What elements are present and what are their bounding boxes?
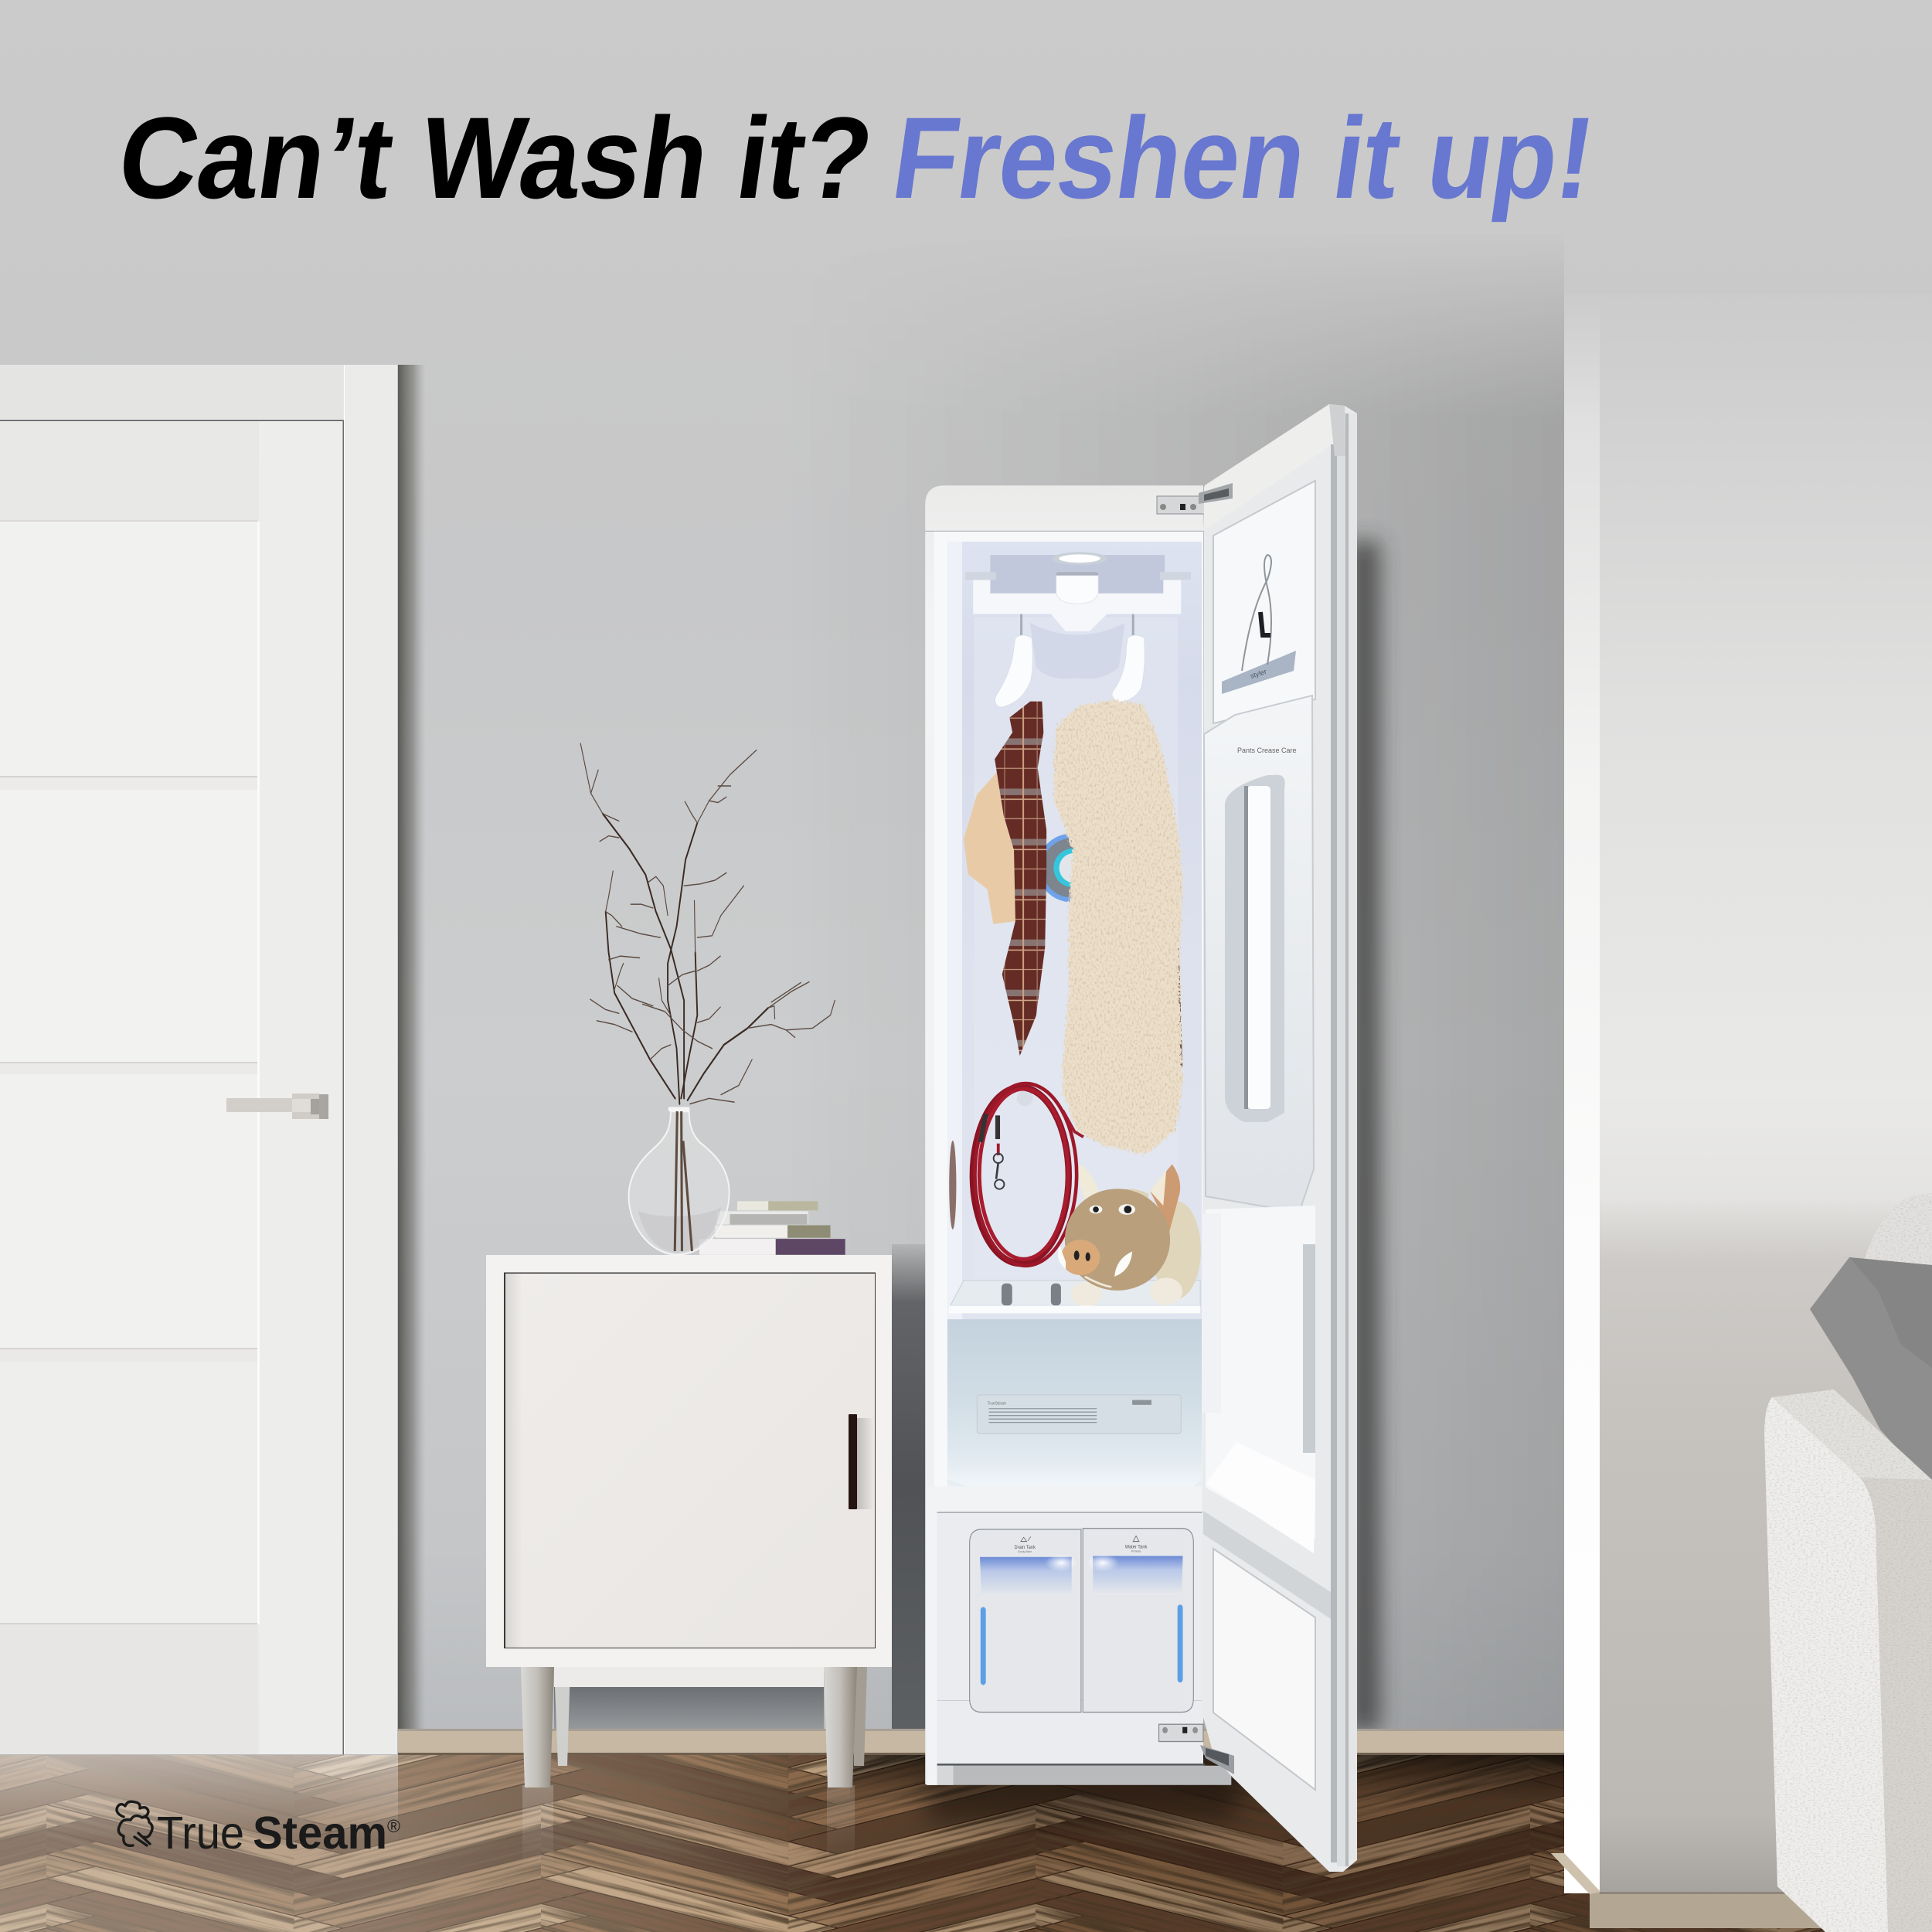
glass vase with branches xyxy=(580,743,835,1255)
water tank: Fill Water xyxy=(1131,1549,1141,1553)
fur coat xyxy=(1054,700,1182,1155)
books stack xyxy=(699,1201,845,1255)
TrueSteam logo: ® xyxy=(387,1816,400,1836)
shelf front lip xyxy=(949,1305,1200,1313)
TrueSteam logo xyxy=(117,1801,400,1859)
hanger rail xyxy=(965,572,1191,636)
plaid pillow xyxy=(995,702,1046,1056)
lower door band xyxy=(1203,1511,1331,1619)
base plinth xyxy=(927,1486,1231,1785)
door edge strips xyxy=(1329,404,1357,1866)
lower frame xyxy=(937,1486,1203,1764)
vent panel xyxy=(977,1395,1181,1434)
lower hinge plate xyxy=(1159,1724,1203,1742)
blue steam vent xyxy=(1037,834,1106,902)
ceiling lamp xyxy=(1053,552,1107,565)
cabinet body xyxy=(925,485,1203,1784)
right hook xyxy=(1112,635,1145,702)
closet lower section with water tanks xyxy=(927,1319,1231,1785)
room door with frame xyxy=(0,365,397,1754)
wall background xyxy=(0,266,1564,1755)
cloud icon xyxy=(117,1801,152,1845)
open closet door xyxy=(1199,404,1357,1872)
door pressing panel xyxy=(1204,696,1314,1213)
door-mounted trouser hanger: styler xyxy=(1250,668,1267,680)
left hook xyxy=(995,635,1032,707)
herringbone wood floor xyxy=(0,1755,1932,1932)
drain tank: Empty Water xyxy=(1018,1550,1032,1553)
door top surface xyxy=(1203,404,1335,531)
lower hinge arm xyxy=(1200,1745,1234,1774)
headline xyxy=(111,94,1602,223)
baseboard xyxy=(398,1729,1565,1755)
door shell xyxy=(1202,404,1357,1872)
tan garment xyxy=(964,768,1017,924)
water tank: Water Tank xyxy=(1125,1544,1148,1550)
panel handle slot xyxy=(1225,775,1285,1122)
right wall column xyxy=(1551,294,1932,1928)
TrueSteam logo: True xyxy=(157,1808,244,1859)
side cabinet xyxy=(486,1255,892,1787)
lower door fold xyxy=(1202,1206,1315,1553)
shelf rack xyxy=(951,1281,1200,1305)
water tank xyxy=(1083,1529,1193,1713)
door handle xyxy=(226,1094,328,1119)
top panel line xyxy=(925,531,1203,532)
vent panel: TrueSteam xyxy=(988,1401,1006,1406)
lower door window xyxy=(1213,1549,1315,1790)
panel caption: Pants Crease Care xyxy=(1237,747,1297,754)
drain tank: Drain Tank xyxy=(1015,1545,1036,1550)
door-mounted trouser hanger xyxy=(1222,555,1296,694)
fridge-style steam closet xyxy=(925,485,1203,1784)
drip tray xyxy=(947,1438,1202,1486)
drain tank xyxy=(970,1529,1081,1713)
lower chamber xyxy=(947,1319,1202,1487)
TrueSteam logo: Steam xyxy=(253,1808,387,1859)
headline: Can’t Wash it? xyxy=(111,94,880,223)
upper door liner xyxy=(1213,481,1315,723)
red leash xyxy=(949,1083,1083,1266)
upper hinge arm xyxy=(1199,483,1233,504)
upper hinge plate xyxy=(1157,496,1206,514)
headline: Freshen it up! xyxy=(886,94,1602,223)
sofa with pillow xyxy=(1764,1193,1932,1932)
plush boar toy xyxy=(1058,1165,1201,1307)
interior chamber xyxy=(934,532,1203,1490)
